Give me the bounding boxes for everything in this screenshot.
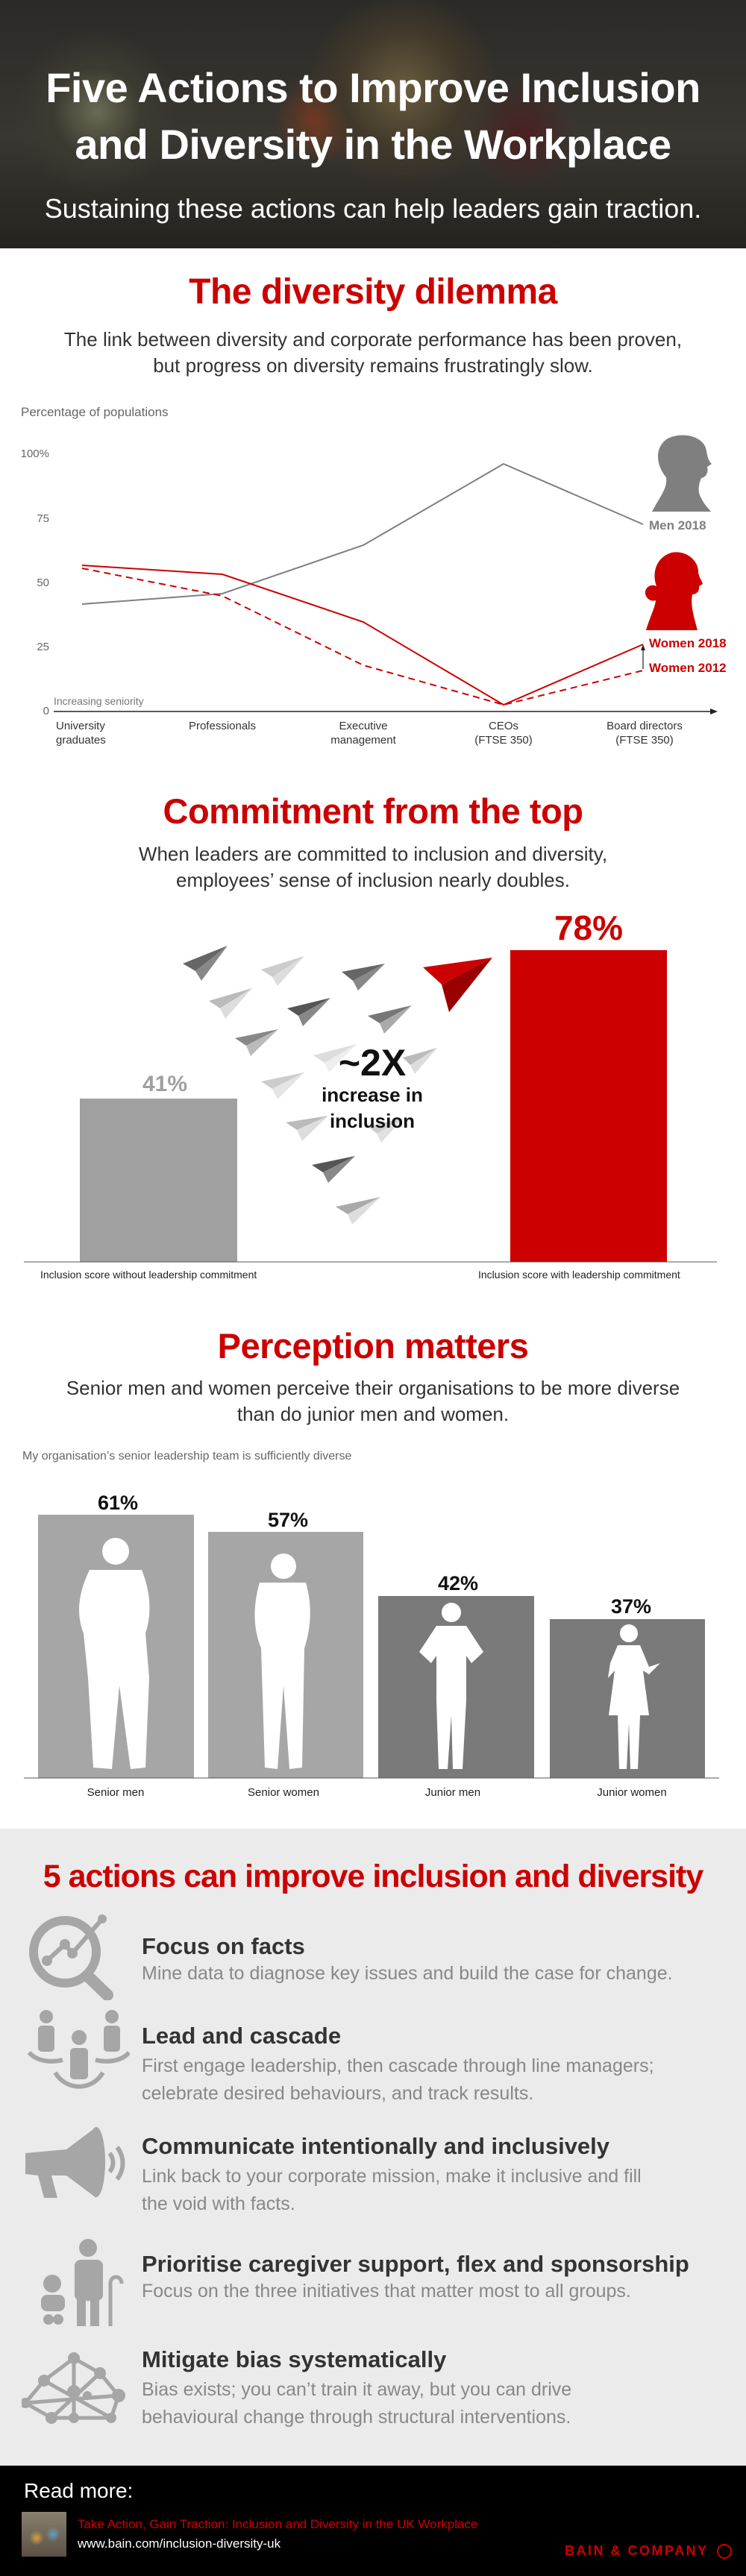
heading: the diversity dilemma: The diversity dilemma <box>189 272 557 312</box>
line chart: 25 <box>37 641 49 653</box>
line chart: 0 <box>43 705 49 717</box>
title: Five Actions to Improve Inclusion <box>46 64 700 111</box>
subtitle: Sustaining these actions can help leaders gain traction. <box>45 193 701 224</box>
bar chart: leadership commitment: inclusion <box>330 1110 415 1132</box>
text: dilemma intro <box>64 328 682 377</box>
bar chart: perception by group: 42% <box>438 1572 478 1595</box>
thumbnail <box>22 2512 66 2557</box>
text: commitment intro: employees’ sense of inclusion nearly doubles. <box>176 869 570 891</box>
bar chart: leadership commitment: 41% <box>142 1072 187 1096</box>
footer <box>0 2466 746 2576</box>
icon: lead and cascade <box>27 2010 130 2089</box>
text: focus on facts <box>142 1933 673 1984</box>
line chart: Increasing seniority <box>54 695 144 707</box>
icon: woman head <box>645 552 703 630</box>
text: perception intro: than do junior men and women. <box>237 1403 509 1425</box>
silhouettes <box>79 1538 660 1769</box>
text: focus on facts: Focus on facts <box>142 1933 305 1959</box>
text: caregiver <box>142 2251 689 2302</box>
text: perception intro: Senior men and women perceive their organisations to be more diverse <box>66 1377 680 1399</box>
text: communicate: Link back to your corporate mission, make it inclusive and fill <box>142 2166 642 2187</box>
title <box>46 64 700 168</box>
line chart: 50 <box>37 577 49 589</box>
text: lead and cascade: celebrate desired behaviours, and track results. <box>142 2083 533 2104</box>
bar chart: leadership commitment: increase in <box>322 1084 423 1106</box>
line chart: Executive <box>339 720 388 732</box>
line chart: Percentage of populations <box>21 405 169 419</box>
line chart: Board directors <box>606 720 683 732</box>
title: and Diversity in the Workplace <box>75 121 671 168</box>
paper planes <box>183 946 492 1225</box>
bar chart: perception by group: 57% <box>268 1509 308 1531</box>
line chart: 75 <box>37 512 49 525</box>
bar chart: leadership commitment <box>24 910 717 1281</box>
bar chart: perception by group: Junior women <box>597 1786 667 1799</box>
text: lead and cascade: Lead and cascade <box>142 2023 341 2049</box>
text: commitment intro <box>139 843 607 891</box>
panel: 5 actions <box>0 1829 746 2466</box>
text: caregiver: Prioritise caregiver support, flex and sponsorship <box>142 2251 689 2277</box>
line chart: Women 2012 <box>649 661 727 675</box>
text: dilemma intro: The link between diversity and corporate performance has been proven, <box>64 328 682 351</box>
text: dilemma intro: but progress on diversity remains frustratingly slow. <box>153 354 593 377</box>
text: perception intro <box>66 1377 680 1425</box>
callout: ~2X: ~2X <box>339 1042 406 1084</box>
bar chart: perception by group: Junior men <box>425 1786 480 1799</box>
line chart: Women 2018 <box>649 636 727 650</box>
text: communicate: the void with facts. <box>142 2193 295 2214</box>
icon: network <box>22 2352 125 2424</box>
text: mitigate bias: Mitigate bias systematically <box>142 2346 446 2372</box>
bar chart: perception by group: Senior women <box>248 1786 319 1799</box>
text: communicate <box>142 2133 642 2214</box>
bar chart: leadership commitment: Inclusion score with leadership commitment <box>478 1269 680 1281</box>
link text: Take Action, Gain Traction: Inclusion and Diversity in the UK Workplace <box>78 2517 477 2531</box>
text: focus on facts: Mine data to diagnose key issues and build the case for change. <box>142 1963 673 1984</box>
line chart: graduates <box>56 734 106 747</box>
text: lead and cascade: First engage leadership, then cascade through line managers; <box>142 2055 654 2076</box>
text: commitment intro: When leaders are committed to inclusion and diversity, <box>139 843 607 865</box>
icon: megaphone <box>25 2127 125 2198</box>
text: caregiver: Focus on the three initiatives that matter most to all groups. <box>142 2281 631 2302</box>
icon: caregiver <box>41 2239 124 2326</box>
line chart <box>21 405 727 747</box>
logo: bain & company: BAIN & COMPANY <box>565 2543 708 2558</box>
text: mitigate bias: Bias exists; you can’t train it away, but you can drive <box>142 2379 571 2400</box>
bar chart: perception by group: 37% <box>611 1595 651 1618</box>
icon: focus on facts <box>29 1914 113 2000</box>
footer: www.bain.com/inclusion-diversity-uk <box>78 2536 280 2551</box>
bar chart: perception by group <box>24 1492 719 1799</box>
header banner <box>0 0 746 248</box>
icon: man head <box>652 435 712 512</box>
line chart: (FTSE 350) <box>474 734 533 747</box>
line chart: University <box>56 720 105 732</box>
text: mitigate bias: behavioural change through structural interventions. <box>142 2407 571 2428</box>
bar chart: perception by group: 61% <box>98 1492 138 1514</box>
text: chart caption: My organisation’s senior leadership team is sufficiently diverse <box>22 1450 351 1463</box>
bar chart: perception by group: Senior men <box>87 1786 144 1799</box>
heading: perception matters: Perception matters <box>218 1326 528 1366</box>
line chart: 100% <box>21 447 49 460</box>
heading: commitment from the top: Commitment from the top <box>163 791 583 831</box>
text: lead and cascade <box>142 2023 654 2104</box>
bar chart: leadership commitment: Inclusion score without leadership commitment <box>40 1269 257 1281</box>
line chart: Men 2018 <box>649 518 706 533</box>
line chart: CEOs <box>489 720 518 732</box>
line chart: (FTSE 350) <box>615 734 674 747</box>
line chart: management <box>330 734 397 747</box>
heading: 5 actions: 5 actions can improve inclusion and diversity <box>43 1859 703 1894</box>
text: mitigate bias <box>142 2346 571 2428</box>
text: communicate: Communicate intentionally and inclusively <box>142 2133 609 2159</box>
line chart: Professionals <box>189 720 256 732</box>
text: read more: Read more: <box>24 2479 133 2502</box>
